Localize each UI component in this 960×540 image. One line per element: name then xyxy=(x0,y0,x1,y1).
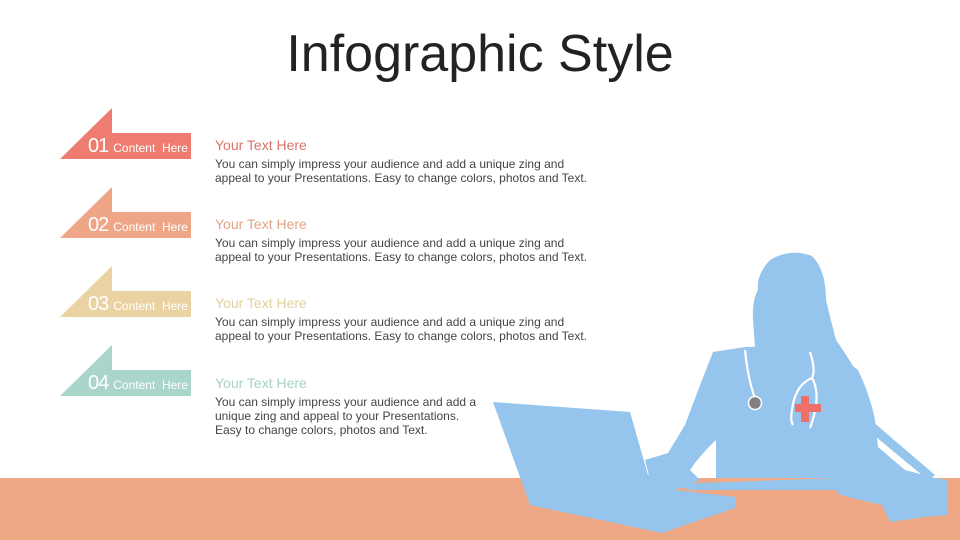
text 02 xyxy=(215,216,587,264)
text 02: appeal to your Presentations. Easy to change colors, photos and Text. xyxy=(215,250,587,264)
title: Infographic Style xyxy=(286,25,674,83)
ribbon 01 xyxy=(60,108,191,159)
text 04: unique zing and appeal to your Presentations. xyxy=(215,409,459,423)
ribbon 01: 01 Content Here xyxy=(88,135,188,157)
body xyxy=(645,346,948,522)
text 01: Your Text Here xyxy=(215,137,307,153)
desk xyxy=(0,478,960,540)
phone cord arm xyxy=(865,415,935,480)
text 01: appeal to your Presentations. Easy to change colors, photos and Text. xyxy=(215,171,587,185)
ribbon 04 xyxy=(60,345,191,396)
text 04: You can simply impress your audience and add a xyxy=(215,395,476,409)
text 01 xyxy=(215,137,587,185)
ribbon 02: 02 Content Here xyxy=(88,214,188,236)
red cross xyxy=(795,396,821,422)
text 03: You can simply impress your audience and add a unique zing and xyxy=(215,315,564,329)
text 03 xyxy=(215,295,587,343)
text 02: You can simply impress your audience and add a unique zing and xyxy=(215,236,564,250)
text 01: You can simply impress your audience and add a unique zing and xyxy=(215,157,564,171)
ribbon 04: 04 Content Here xyxy=(88,372,188,394)
text 02: Your Text Here xyxy=(215,216,307,232)
ribbon 02 xyxy=(60,187,191,238)
ribbon 03 xyxy=(60,266,191,317)
text 04 xyxy=(215,375,476,437)
text 04: Your Text Here xyxy=(215,375,307,391)
laptop xyxy=(493,402,735,533)
desk objects xyxy=(672,478,850,490)
text 04: Easy to change colors, photos and Text. xyxy=(215,423,428,437)
head xyxy=(753,253,858,380)
text 03: appeal to your Presentations. Easy to change colors, photos and Text. xyxy=(215,329,587,343)
text 03: Your Text Here xyxy=(215,295,307,311)
stethoscope xyxy=(745,350,817,428)
ribbon 03: 03 Content Here xyxy=(88,293,188,315)
